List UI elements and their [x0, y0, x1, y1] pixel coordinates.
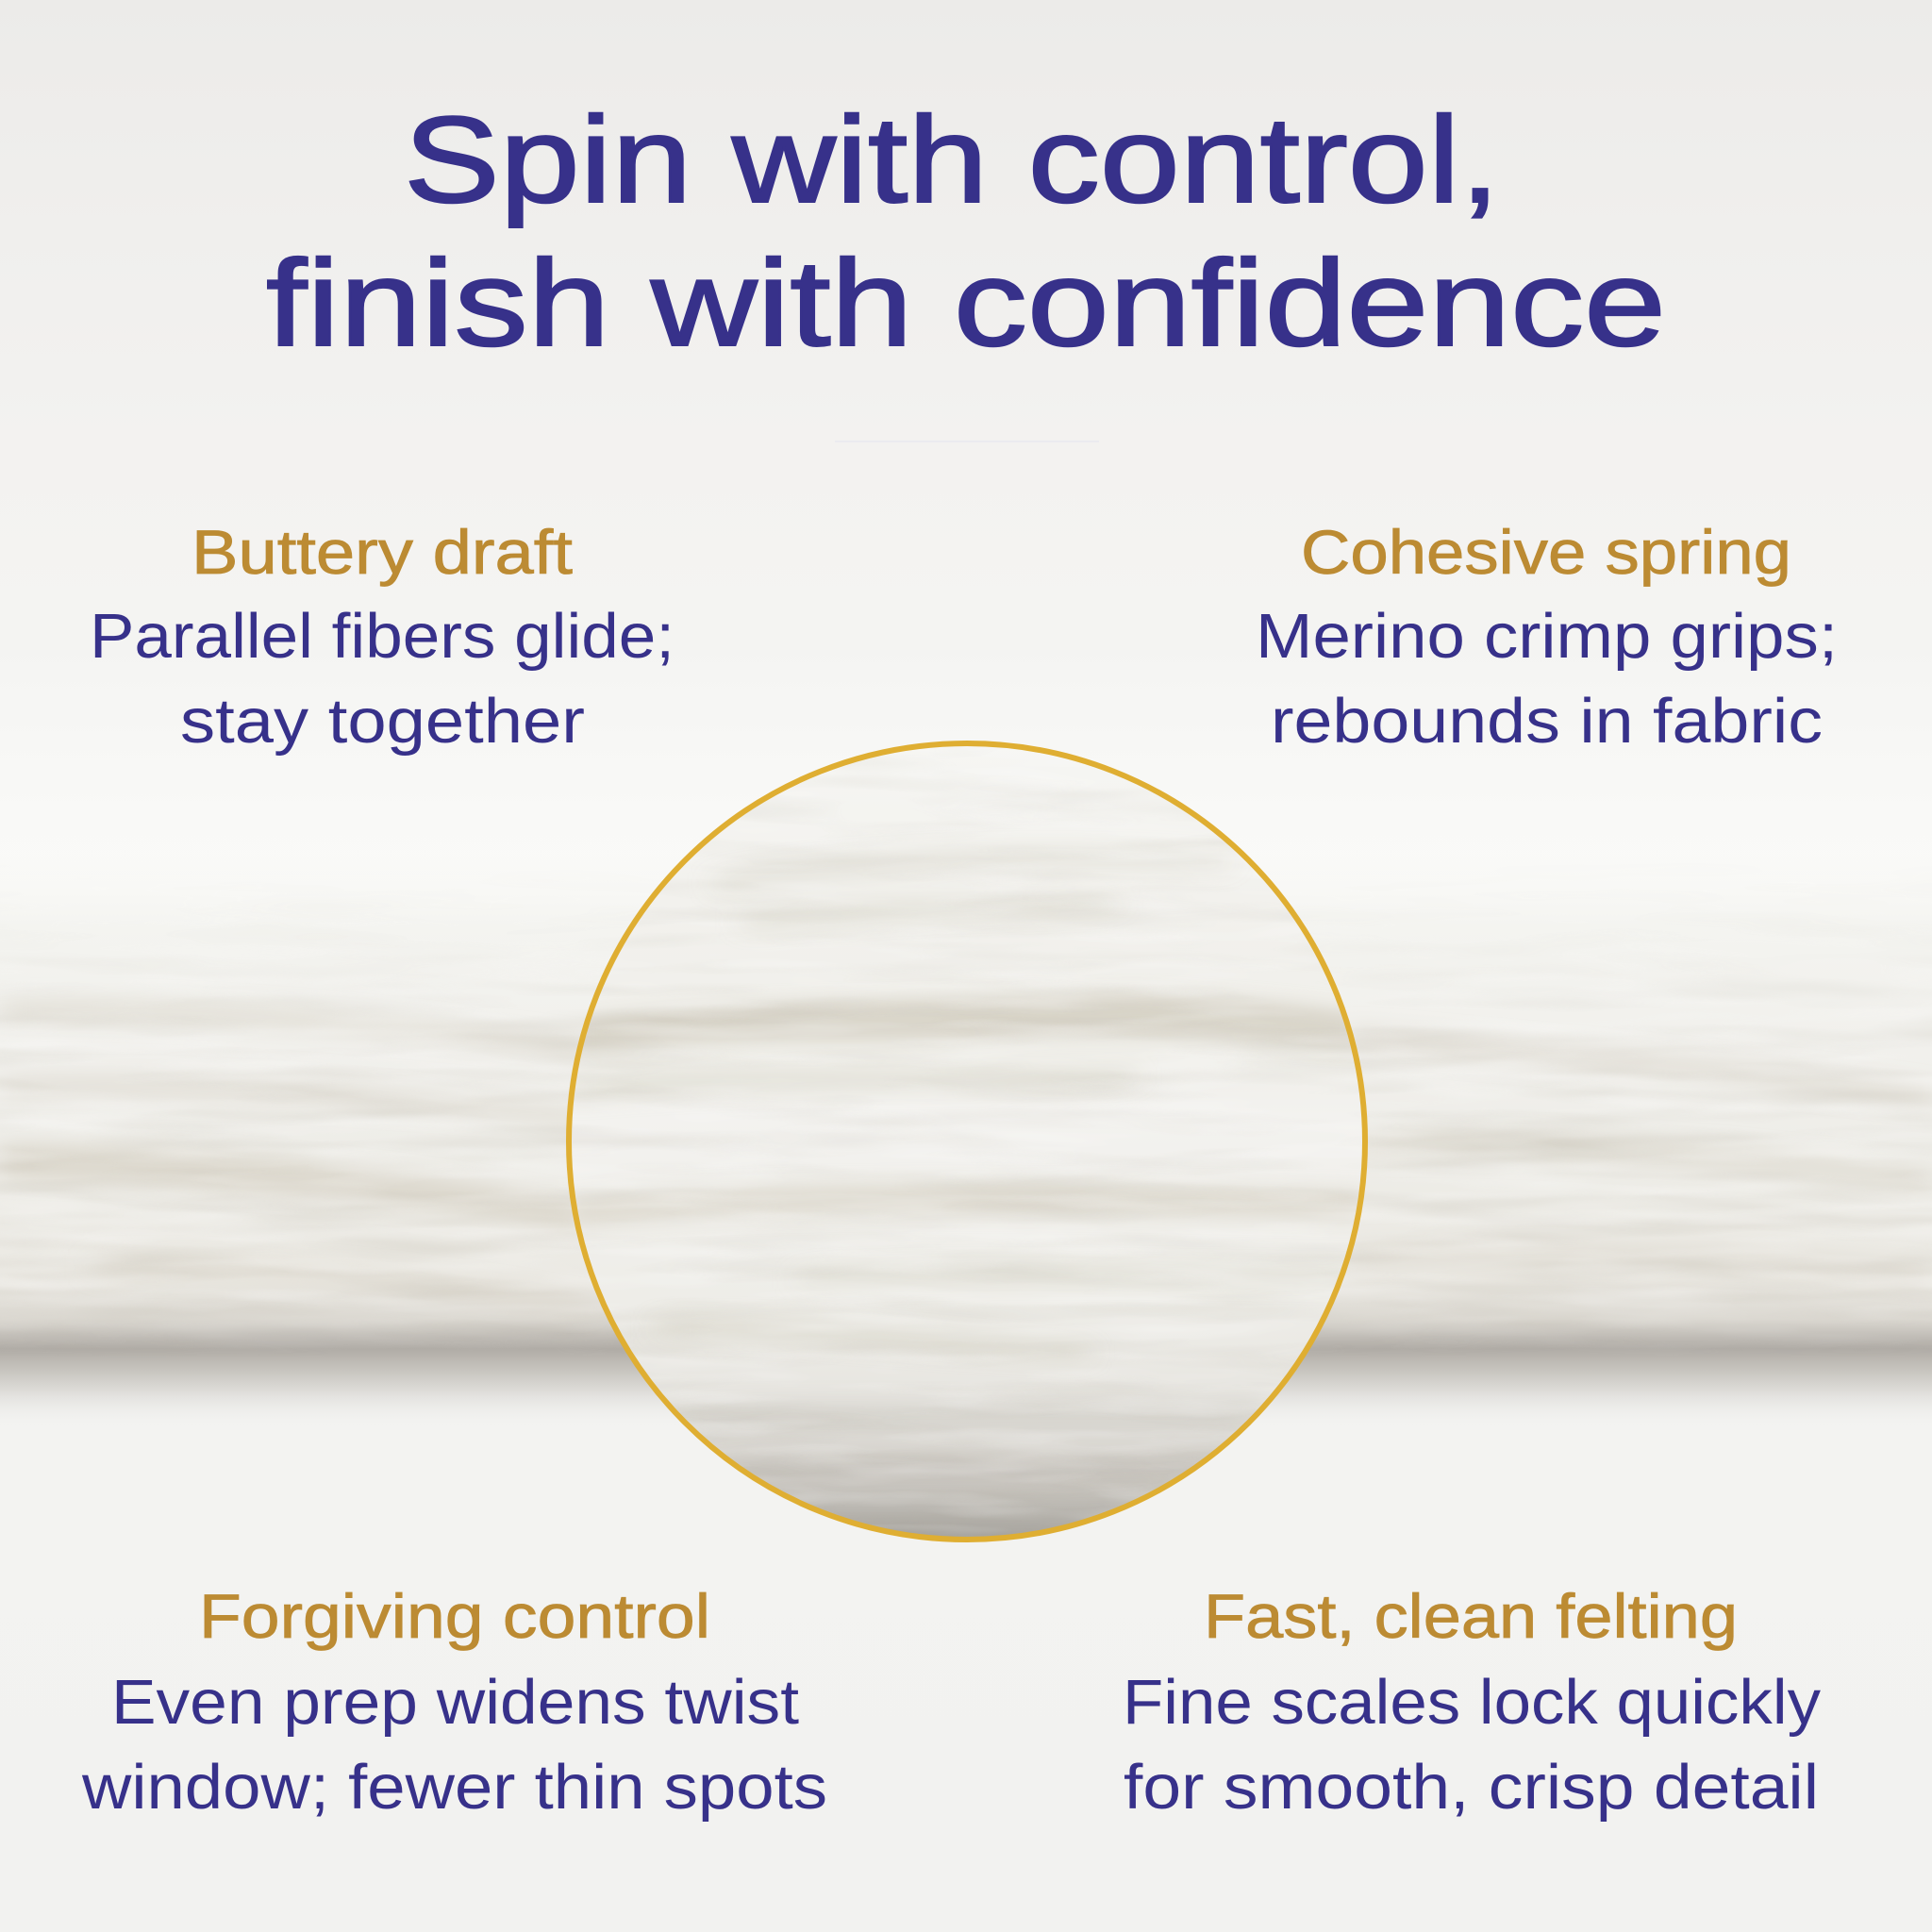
title	[266, 91, 1666, 372]
text block: Forgiving control	[81, 1581, 827, 1823]
text block: Cohesive spring	[1256, 517, 1838, 757]
magnifier circle	[566, 741, 1368, 1542]
text block: Buttery draft: Parallel fibers glide;	[90, 601, 675, 672]
gold ring	[569, 743, 1365, 1540]
fiber roving band	[0, 909, 1932, 1407]
text block: Fast, clean felting: Fine scales lock quickly	[1123, 1667, 1822, 1738]
text block: Buttery draft: Buttery draft	[192, 517, 573, 587]
text block: Cohesive spring: Merino crimp grips;	[1256, 601, 1838, 672]
lens streaks	[566, 847, 1368, 1362]
text block: Cohesive spring: rebounds in fabric	[1271, 686, 1823, 757]
text block: Buttery draft	[90, 517, 675, 757]
text block: Fast, clean felting	[1123, 1581, 1822, 1823]
text block: Cohesive spring: Cohesive spring	[1301, 517, 1791, 587]
title: Spin with control,	[404, 91, 1500, 228]
text block: Forgiving control: Even prep widens twist	[111, 1667, 799, 1738]
text block: Forgiving control: window; fewer thin spots	[81, 1752, 827, 1823]
left band streaks	[0, 996, 585, 1317]
text block: Fast, clean felting: Fast, clean felting	[1204, 1581, 1738, 1651]
text block: Forgiving control: Forgiving control	[199, 1581, 710, 1651]
right band streaks	[1349, 1024, 1932, 1289]
text block: Fast, clean felting: for smooth, crisp detail	[1124, 1752, 1819, 1823]
text block: Buttery draft: stay together	[180, 686, 585, 757]
title: finish with confidence	[266, 234, 1666, 372]
